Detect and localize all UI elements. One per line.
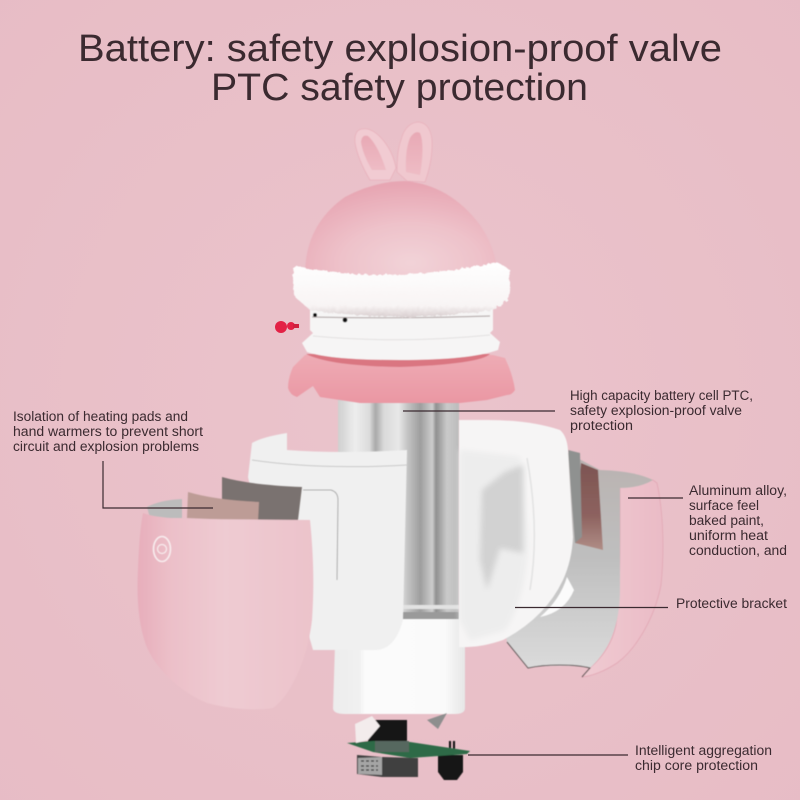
right copper plate <box>575 463 603 550</box>
label: isolation <box>13 409 203 454</box>
left shell body <box>138 513 313 709</box>
lower white housing and circuit board <box>333 612 470 780</box>
white bracket <box>248 420 573 650</box>
ears <box>355 122 432 182</box>
label: battery cell: protection <box>570 418 633 433</box>
label: battery cell <box>570 388 753 433</box>
leader: chip <box>468 754 628 756</box>
left shell <box>138 477 313 709</box>
translucent window <box>460 450 528 640</box>
label: aluminum: Aluminum alloy, <box>689 483 787 498</box>
right shell pink edge <box>582 478 663 677</box>
logo <box>154 536 170 562</box>
rim shadow lines <box>507 642 590 677</box>
label: aluminum: baked paint, <box>689 513 764 528</box>
highlight <box>540 577 574 617</box>
white neck <box>302 305 500 360</box>
leader: aluminum <box>628 497 683 499</box>
bracket left half <box>248 433 407 650</box>
battery cell <box>338 395 459 619</box>
pink base <box>288 351 515 403</box>
left shell inner lip <box>147 499 182 518</box>
title: Battery: safety explosion-proof valve <box>78 28 722 70</box>
title: PTC safety protection <box>211 67 588 109</box>
rabbit lid <box>288 122 515 403</box>
lower white housing <box>333 612 465 714</box>
red gourd valve <box>275 321 299 333</box>
bracket right half <box>459 420 573 647</box>
label: battery cell: High capacity battery cell PTC, <box>570 388 753 403</box>
label: chip: Intelligent aggregation <box>635 743 772 758</box>
dark pad <box>222 477 302 520</box>
label: aluminum <box>689 483 787 558</box>
label: aluminum: conduction, and <box>689 543 787 558</box>
title <box>78 28 722 109</box>
label: isolation: circuit and explosion problems <box>13 439 199 454</box>
circuit board <box>347 713 470 780</box>
right shell inner silver <box>500 452 653 668</box>
label: isolation: Isolation of heating pads and <box>13 409 188 424</box>
label: chip <box>635 743 772 773</box>
label: isolation: hand warmers to prevent short <box>13 424 203 439</box>
label: bracket: Protective bracket <box>676 596 787 611</box>
copper pad <box>187 492 259 521</box>
label: chip: chip core protection <box>635 758 758 773</box>
fur band <box>293 262 510 317</box>
leader: battery cell <box>403 410 555 412</box>
right grey plate <box>568 450 582 543</box>
label: aluminum: surface feel <box>689 498 759 513</box>
label: aluminum: uniform heat <box>689 528 768 543</box>
leader: bracket <box>515 606 668 608</box>
dome <box>305 181 497 290</box>
right shell <box>500 450 663 677</box>
leader: isolation <box>103 461 213 508</box>
label: battery cell: safety explosion-proof valve <box>570 403 742 418</box>
